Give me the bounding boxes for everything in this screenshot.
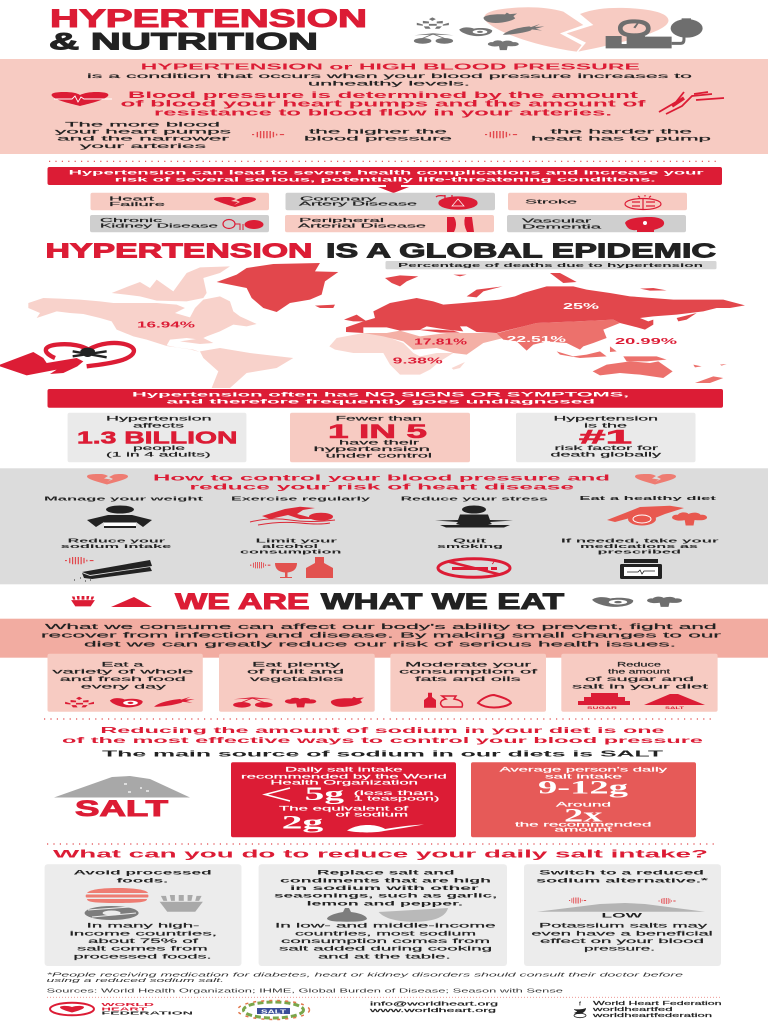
value: 9-12g: 9-12g <box>538 777 629 798</box>
card: reduced sodium alternative: even have a beneficial <box>531 930 714 937</box>
control heading: How to control your blood pressure and <box>153 473 610 483</box>
icon: fries <box>71 596 95 606</box>
panel: chronic kidney disease: Chronic <box>100 218 163 224</box>
panel: heart failure <box>90 193 269 210</box>
panel: coronary artery disease <box>286 193 495 210</box>
icon: pulse arrow 1 <box>252 131 284 138</box>
stat: 1.3 billion <box>68 413 246 462</box>
panel: vascular dementia: Dementia <box>522 224 604 230</box>
icon: broken heart right <box>635 474 676 484</box>
tip: medications: If needed, take your <box>561 539 721 545</box>
icon: donut <box>85 906 139 920</box>
stat: number one: death globally <box>550 452 663 459</box>
card: avoid processed foods: income countries, <box>70 930 217 937</box>
map: greenland <box>217 263 338 312</box>
icon: broken heart left <box>87 474 128 484</box>
tip: reduce your stress <box>401 497 548 528</box>
stat: 1.3 billion: 1.3 BILLION <box>77 428 238 448</box>
icon: heart with warning <box>436 195 477 209</box>
panel: recommended salt intake: of sodium <box>336 812 408 818</box>
tip: quit smoking: smoking <box>437 544 504 550</box>
panel: recommended salt intake: (less than <box>354 791 434 797</box>
icon: brain <box>625 195 661 210</box>
stat: 1.3 billion: affects <box>133 422 184 429</box>
title: HYPERTENSION <box>50 6 367 33</box>
social links <box>574 1001 722 1019</box>
icon: low salt pile <box>537 903 705 912</box>
tip: manage your weight <box>44 497 203 528</box>
tip: limit alcohol: Limit your <box>256 539 339 545</box>
card: fruit and vegetables: of fruit and <box>247 669 345 676</box>
control heading <box>153 473 610 491</box>
icon: broccoli <box>647 597 682 607</box>
value: 5g: 5g <box>305 784 345 805</box>
banner: no signs or symptoms <box>48 389 723 408</box>
tip: manage your weight: Manage your weight <box>44 497 203 503</box>
heading: global epidemic: HYPERTENSION <box>46 240 312 262</box>
stat: 1.3 billion: (1 in 4 adults) <box>106 452 211 459</box>
blood pressure explanation: resistance to blood flow in your arteries. <box>154 107 612 117</box>
tip: limit alcohol <box>240 539 343 578</box>
panel: recommended salt intake: Daily salt intake <box>285 768 404 774</box>
card: avoid processed foods: foods. <box>117 877 168 884</box>
icon: medicine bottle <box>620 559 662 579</box>
tip: eat a healthy diet <box>579 496 716 526</box>
icon: jug <box>441 696 463 707</box>
banner: no signs or symptoms: and therefore frequently goes undiagnosed <box>166 399 595 406</box>
card: replace salt and condiments: lemon and pepper. <box>307 900 463 907</box>
definition heading: HYPERTENSION or HIGH BLOOD PRESSURE <box>141 61 641 71</box>
icon: head <box>625 217 664 232</box>
tip: limit alcohol: consumption <box>240 549 343 555</box>
map labels: 25% <box>563 302 599 311</box>
map labels: 9.38% <box>393 356 443 365</box>
card: avoid processed foods: about 75% of <box>88 938 198 945</box>
card: replace salt and condiments <box>259 864 507 966</box>
subheading: The main source of sodium in our diets is SALT <box>102 749 663 758</box>
card: replace salt and condiments: seasonings, such as garlic, <box>274 893 497 900</box>
card: sugar and salt: Reduce <box>617 661 662 668</box>
card: reduced sodium alternative: sodium alternative.* <box>536 877 709 884</box>
panel: peripheral arterial disease: Peripheral <box>299 218 384 224</box>
card: fats and oils: fats and oils <box>415 676 523 683</box>
panel: chronic kidney disease: Kidney Disease <box>100 224 218 230</box>
panel: average salt intake <box>471 762 696 837</box>
social links: f <box>579 1002 581 1008</box>
card: sugar and salt <box>561 654 718 712</box>
flow step 1 <box>55 122 233 150</box>
card: whole and fresh food: every day <box>81 683 168 690</box>
card: avoid processed foods: salt comes from <box>77 946 209 953</box>
sources: Sources: World Health Organization; IHME, Global Burden of Disease; Season with Sense <box>46 989 564 995</box>
card: whole and fresh food: variety of whole <box>52 669 194 676</box>
flow step 1: your arteries <box>80 143 208 150</box>
icon: salt pile <box>644 694 705 710</box>
card: sugar and salt: the amount <box>608 669 670 676</box>
icon: kidneys <box>223 220 264 230</box>
card: reduced sodium alternative <box>524 864 721 966</box>
logo: world heart federation: HEART <box>101 1006 148 1011</box>
card: fats and oils: Moderate your <box>405 661 533 668</box>
panel: heart failure: Failure <box>109 202 165 208</box>
icon: pizza <box>111 597 152 607</box>
contact details: www.worldheart.org <box>370 1008 496 1014</box>
value: 2x: 2x <box>564 806 604 827</box>
card: replace salt and condiments: condiments that are high <box>280 877 491 884</box>
card: replace salt and condiments: Replace salt and <box>317 870 454 877</box>
icon: broken heart, food and blood pressure gauge <box>414 7 703 52</box>
icon: artery <box>659 92 724 114</box>
icon: healthy food <box>607 506 707 526</box>
icon: salt pile with label: SALT <box>75 796 169 821</box>
stat: number one: is the <box>584 422 628 429</box>
icon: heart with pulse <box>52 92 112 106</box>
icon: strawberry <box>331 697 364 707</box>
panel: stroke <box>508 193 687 210</box>
panel: average salt intake: Average person's daily <box>500 768 667 774</box>
tip: medications: prescribed <box>598 549 682 555</box>
map legend pill <box>386 261 716 269</box>
heading: we are what we eat <box>71 589 682 614</box>
flow step 3 <box>531 129 712 143</box>
panel: average salt intake: salt intake <box>545 774 624 780</box>
map: africa and asia <box>329 273 745 383</box>
panel: average salt intake: the recommended <box>515 823 651 829</box>
icon: salt pile: SALT <box>665 706 686 710</box>
panel: vascular dementia: Vascular <box>522 219 591 225</box>
arrow <box>378 185 409 193</box>
sodium heading: of the most effective ways to control your blood pressure <box>62 736 705 745</box>
icon: person with tape <box>87 506 152 528</box>
map labels: 17.81% <box>414 338 467 347</box>
banner: no signs or symptoms: Hypertension often has NO SIGNS OR SYMPTOMS, <box>132 392 630 399</box>
card: fats and oils: consumption of <box>399 669 538 676</box>
banner: complications: Hypertension can lead to severe health complications and increase your <box>69 169 705 176</box>
control heading: reduce your risk of heart disease <box>190 481 575 491</box>
card: whole and fresh food: Eat a <box>101 661 144 668</box>
panel: heart failure: Heart <box>109 197 155 203</box>
heading text <box>175 589 565 614</box>
map labels: 22.51% <box>507 335 566 344</box>
tip: quit smoking <box>437 539 510 577</box>
card: reduced sodium alternative: pressure. <box>584 946 655 953</box>
stat: 1 in 5: have their <box>339 439 421 446</box>
tip: reduce your stress: Reduce your stress <box>401 497 548 503</box>
stat: 1 in 5: under control <box>326 453 432 460</box>
flow step 1: your heart pumps <box>55 129 233 136</box>
stat: number one: risk factor for <box>554 445 660 452</box>
map labels: 20.99% <box>615 337 677 346</box>
blood pressure explanation: of blood your heart pumps and the amount of <box>120 99 646 109</box>
map labels <box>137 302 677 365</box>
map labels: 16.94% <box>137 320 195 329</box>
panel: vascular dementia <box>507 215 686 232</box>
flow step 3: heart has to pump <box>531 136 712 143</box>
title <box>49 6 367 56</box>
card: reduced sodium alternative: Switch to a reduced <box>539 870 704 877</box>
contact details: info@worldheart.org <box>370 1002 498 1008</box>
icon: broken heart <box>214 197 256 207</box>
heading text: WE ARE <box>175 589 310 614</box>
icon: lemon <box>379 908 448 922</box>
logo: less salt <box>238 1000 310 1020</box>
tip: limit alcohol: alcohol <box>262 544 319 550</box>
icon: garlic <box>327 908 367 922</box>
world map <box>28 263 745 388</box>
icon: spoon <box>347 824 424 832</box>
card: reduced sodium alternative: Potassium salts may <box>539 923 709 930</box>
stat: number one <box>516 413 696 462</box>
blood pressure explanation <box>120 90 646 117</box>
icon: wine and bottle <box>250 557 333 578</box>
card: fats and oils <box>390 654 546 712</box>
icon: salt shaker <box>65 557 152 581</box>
card: fruit and vegetables: vegetables <box>250 676 345 683</box>
tip: eat a healthy diet: Eat a healthy diet <box>579 496 716 502</box>
logo: world heart federation <box>50 1002 193 1016</box>
card: fruit and vegetables <box>219 654 375 712</box>
panel: recommended salt intake: 1 teaspoon) <box>354 797 439 803</box>
icon: avocado <box>592 597 633 607</box>
card: fruit and vegetables: Eat plenty <box>252 661 342 668</box>
card: avoid processed foods: Avoid processed <box>74 870 212 877</box>
stat: 1 in 5: 1 IN 5 <box>328 421 427 443</box>
definition text <box>87 73 693 88</box>
footnote <box>46 972 683 984</box>
icon: swimmer <box>250 507 335 525</box>
stat: 1 in 5: hypertension <box>314 446 431 453</box>
social links: World Heart Federation <box>593 1001 722 1007</box>
panel: definition band <box>0 59 768 154</box>
map: americas <box>28 266 293 388</box>
tip: exercise regularly <box>231 497 372 525</box>
panel: recommended salt intake: recommended by the World <box>241 774 447 780</box>
contact details <box>370 1002 498 1014</box>
panel: coronary artery disease: Artery Disease <box>299 202 417 208</box>
sodium heading: Reducing the amount of sodium in your diet is one <box>100 726 667 735</box>
flow step 2: blood pressure <box>304 136 453 143</box>
icon: broccoli <box>285 698 316 707</box>
card: avoid processed foods: processed foods. <box>74 953 212 960</box>
panel: peripheral arterial disease: Arterial Disease <box>298 224 426 230</box>
map legend pill: Percentage of deaths due to hypertension <box>398 263 703 269</box>
panel: chronic kidney disease <box>90 215 269 232</box>
definition text: is a condition that occurs when your blood pressure increases to <box>87 73 693 80</box>
icon: carrot <box>154 697 195 707</box>
card: reduced sodium alternative: LOW <box>602 913 644 920</box>
card: avoid processed foods: In many high- <box>87 923 199 930</box>
map: middle east <box>363 331 510 355</box>
icon: wheat <box>65 697 94 707</box>
card: replace salt and condiments: consumption comes from <box>281 938 491 945</box>
icon: meditating person <box>435 506 513 528</box>
card: replace salt and condiments: salt added during cooking <box>279 946 493 953</box>
definition text: unhealthy levels. <box>308 81 470 88</box>
tip: exercise regularly: Exercise regularly <box>231 497 372 503</box>
stat: 1.3 billion: Hypertension <box>106 416 213 423</box>
icon: avocado <box>110 698 143 707</box>
icon: down arrows <box>569 898 676 904</box>
footnote: *People receiving medication for diabetes, heart or kidney disorders should consult their doctor before <box>46 972 683 978</box>
icon: no smoking <box>438 559 510 577</box>
tip: reduce sodium: sodium intake <box>61 544 174 550</box>
stat: number one: #1 <box>579 427 633 448</box>
panel: consumption band <box>0 619 768 658</box>
icon: oil drop <box>478 695 511 708</box>
logo: world heart federation: FEDERATION <box>101 1011 193 1016</box>
map: south-east asia and oceania <box>497 320 727 383</box>
logo: world heart federation: WORLD <box>101 1002 156 1007</box>
panel: recommended salt intake: Health Organization <box>270 780 418 786</box>
heading text: WHAT WE EAT <box>321 589 565 614</box>
flow step 1: The more blood <box>65 122 221 129</box>
banner: complications <box>48 167 722 185</box>
panel: recommended salt intake <box>231 762 456 837</box>
banner: complications: risk of several serious, potentially life-threatening conditions. <box>115 176 656 184</box>
card: replace salt and condiments: In low- and middle-income <box>275 923 497 930</box>
card: reduced sodium alternative: effect on your blood <box>540 938 705 945</box>
stat: number one: Hypertension <box>554 416 659 423</box>
icon: cherries <box>233 697 273 708</box>
icon: fries <box>160 895 203 912</box>
stat: 1.3 billion: people <box>133 445 186 452</box>
tip: medications <box>561 539 721 579</box>
icon: burger <box>86 888 148 903</box>
card: whole and fresh food <box>48 654 203 712</box>
map: eurasia <box>344 273 745 333</box>
card: sugar and salt: of sugar and <box>585 676 695 683</box>
icon: sugar cubes: SUGAR <box>587 706 618 710</box>
social links: worldheartfed <box>593 1007 673 1013</box>
icon: oil bottle <box>424 693 436 708</box>
stat: 1 in 5: Fewer than <box>336 416 423 423</box>
panel: peripheral arterial disease <box>285 215 494 232</box>
panel: coronary artery disease: Coronary <box>300 196 377 202</box>
tip: quit smoking: Quit <box>453 539 486 545</box>
icon: salt pile with label <box>54 776 190 821</box>
social links: worldheartfederation <box>593 1013 712 1019</box>
value: 2g: 2g <box>282 812 324 833</box>
card: avoid processed foods <box>45 864 241 966</box>
flow step 2: the higher the <box>309 129 448 136</box>
panel: recommended salt intake: The equivalent of <box>279 806 409 812</box>
card: sugar and salt: salt in your diet <box>572 683 708 690</box>
panel: consumption band: recover from infection and disease. By making small changes to our <box>41 631 722 640</box>
panel: consumption band: What we consume can affect our body's ability to prevent, fight and <box>45 622 717 631</box>
panel: how to control blood pressure <box>0 468 768 584</box>
panel: consumption band: diet we can greatly reduce our risk of serious health issues. <box>84 639 676 648</box>
heading: reduce daily salt: What can you do to reduce your daily salt intake? <box>53 848 709 860</box>
blood pressure explanation: Blood pressure is determined by the amount <box>128 90 638 100</box>
logo: less salt: SALT <box>261 1010 287 1016</box>
flow step 2 <box>304 129 453 143</box>
flow step 3: the harder the <box>550 129 693 136</box>
icon: narrowed artery <box>447 217 474 232</box>
stat: 1 in 5 <box>290 413 470 462</box>
card: replace salt and condiments: countries, most sodium <box>295 930 477 937</box>
less than sign <box>265 788 290 801</box>
card: replace salt and condiments: in sodium with other <box>290 885 480 892</box>
panel: stroke: Stroke <box>525 199 577 205</box>
card: replace salt and condiments: and at the table. <box>318 953 451 960</box>
icon: hand holding heart with skull <box>0 343 134 375</box>
tip: reduce sodium <box>61 539 174 581</box>
heading: global epidemic <box>46 240 716 262</box>
sodium heading <box>62 726 705 758</box>
title: & NUTRITION <box>49 28 318 56</box>
tip: medications: medications as <box>580 544 698 550</box>
heading: global epidemic: IS A GLOBAL EPIDEMIC <box>326 240 716 262</box>
panel: average salt intake: amount <box>554 828 613 834</box>
icon: pulse arrow 2 <box>485 131 517 138</box>
card: whole and fresh food: and fresh food <box>60 676 187 683</box>
tip: reduce sodium: Reduce your <box>68 539 167 545</box>
icon: sugar cubes <box>578 693 630 710</box>
panel: average salt intake: Around <box>556 802 611 808</box>
footnote: using a reduced sodium salt. <box>46 978 224 984</box>
flow step 1: and the narrower <box>57 136 231 143</box>
